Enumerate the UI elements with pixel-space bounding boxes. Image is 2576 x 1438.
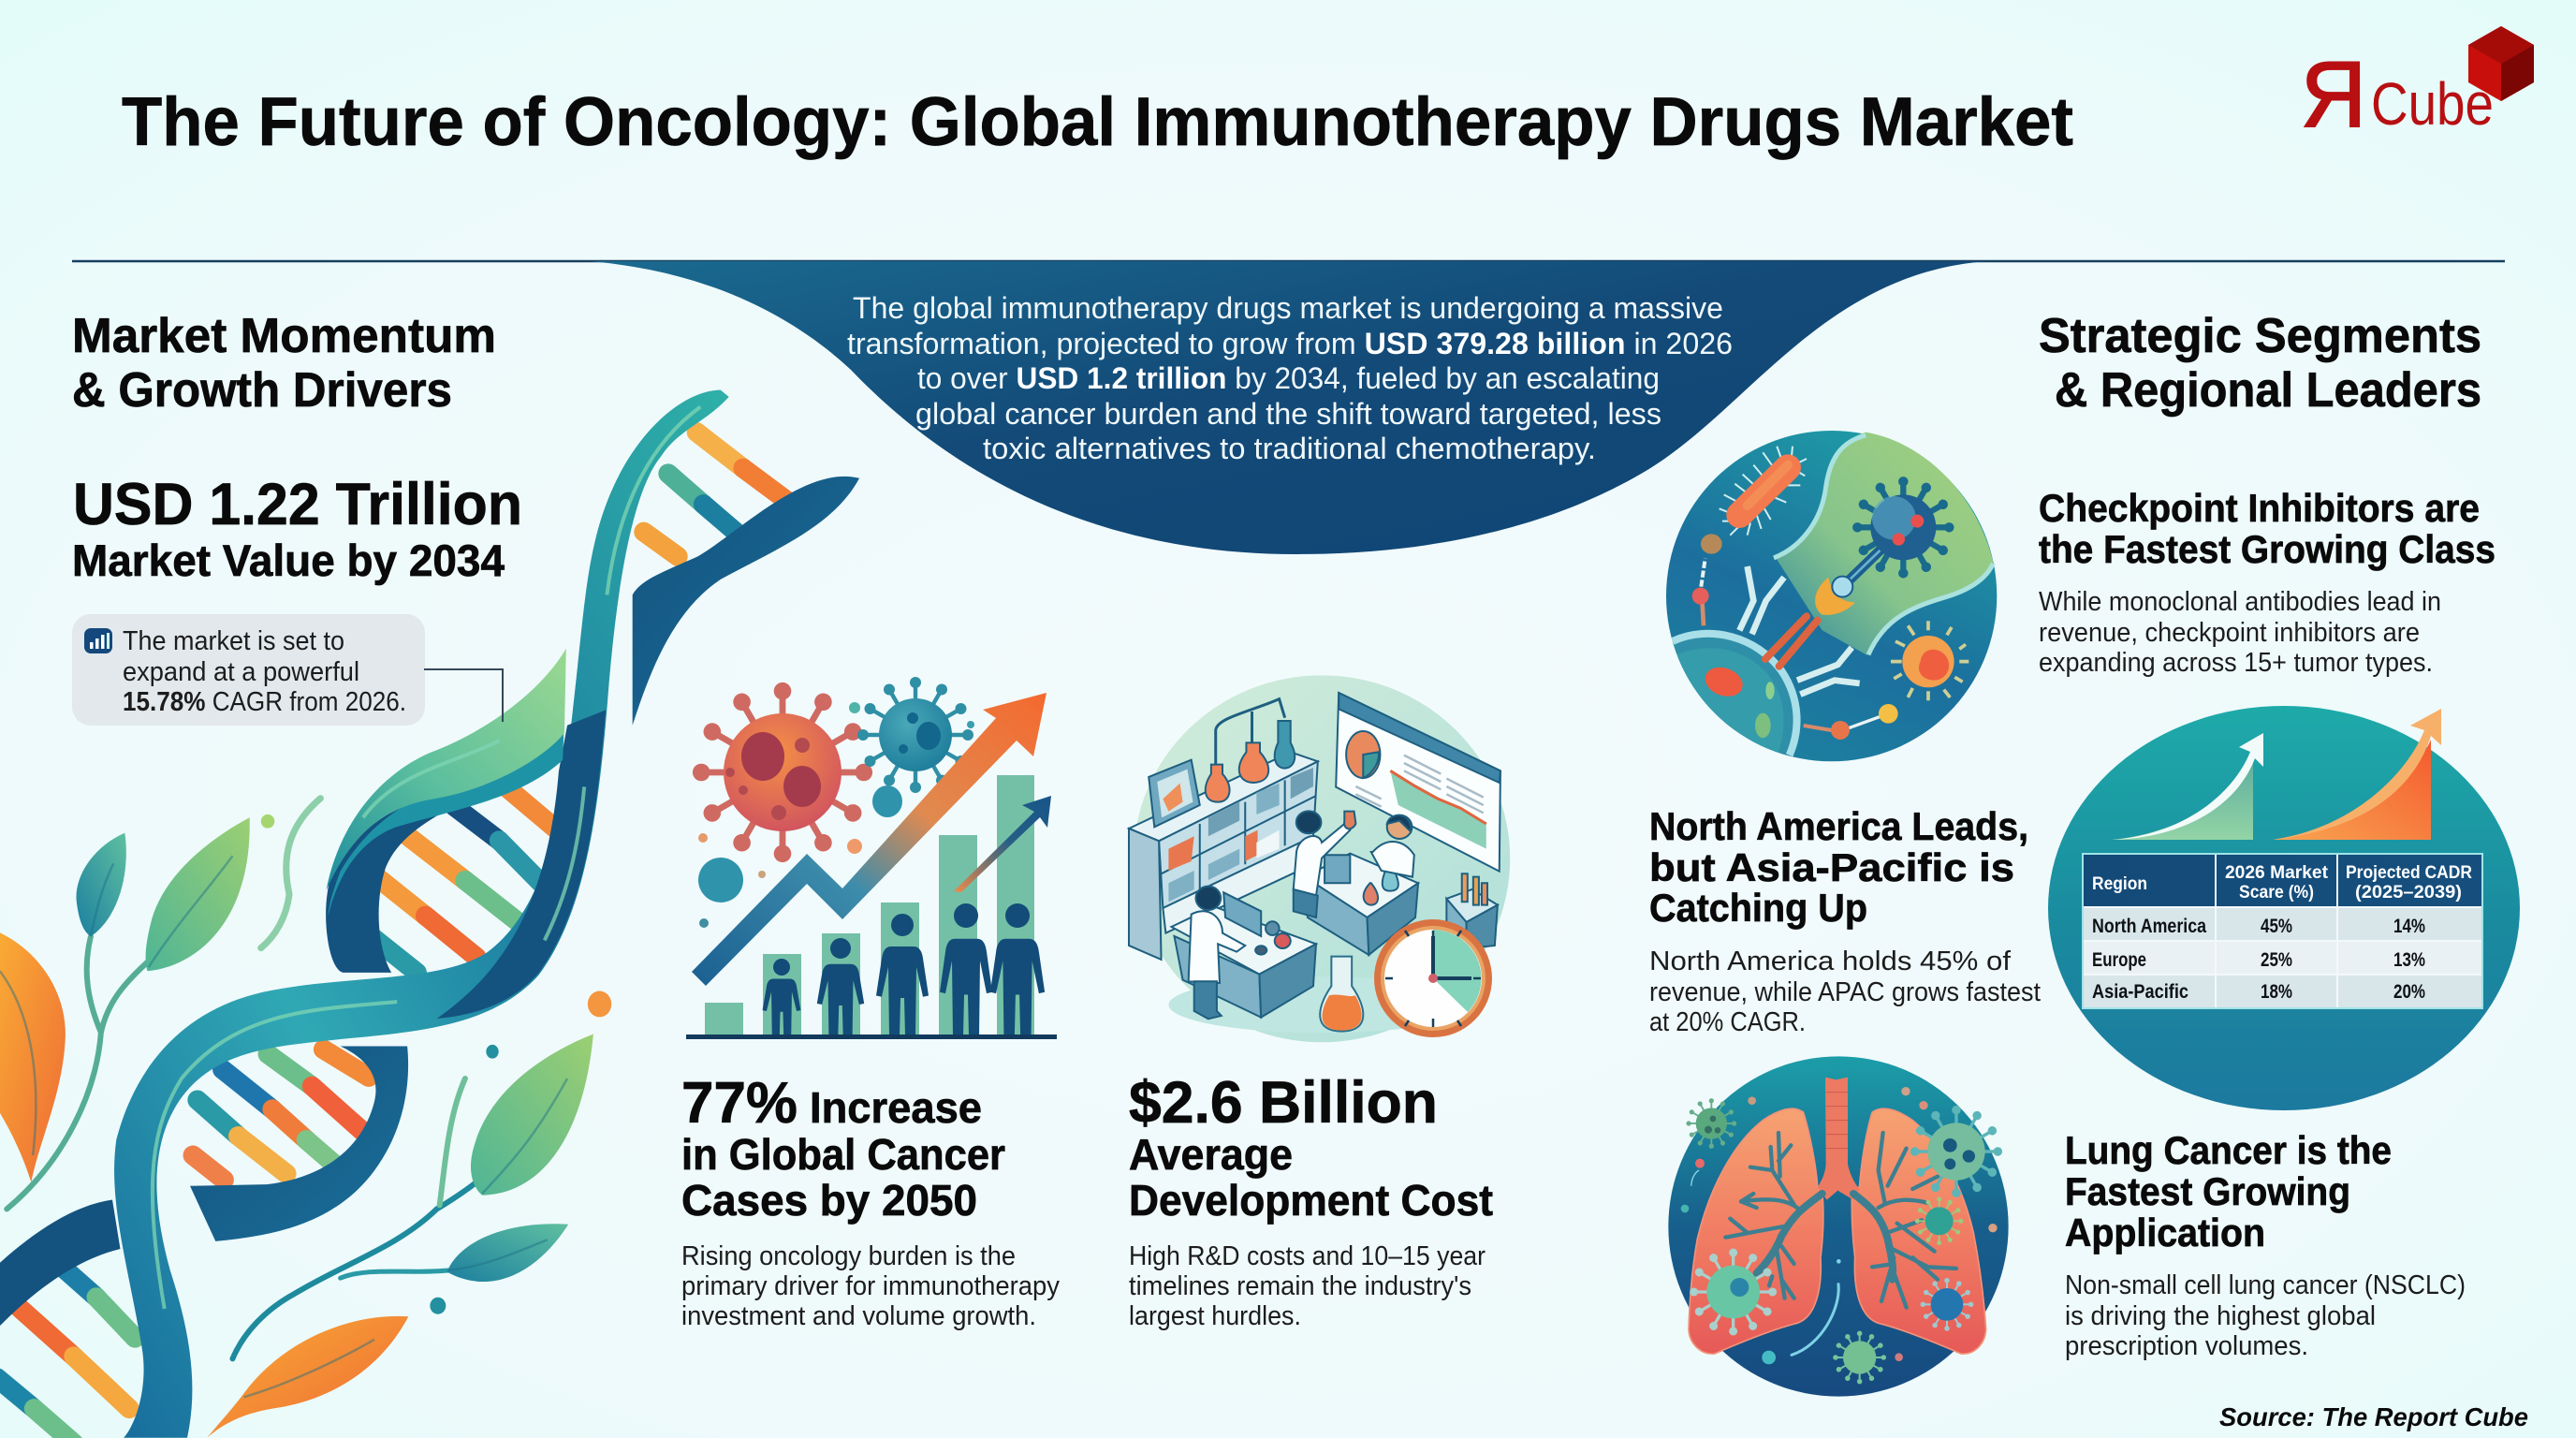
right heading — [2039, 309, 2481, 418]
text: development hurdles: High R&D costs and 10–15 year — [1129, 1241, 1486, 1271]
region table: 2026 Market — [2225, 863, 2329, 883]
antibody prongs and cup — [1765, 578, 1855, 667]
stat: market value: USD 1.22 Trillion — [73, 472, 522, 537]
logo: RCube: Я — [2301, 42, 2366, 146]
text: checkpoint inhibitors: While monoclonal antibodies lead in — [2039, 587, 2441, 617]
intro text: global cancer burden and the shift toward targeted, less — [915, 397, 1661, 431]
text: lung cancer: Non-small cell lung cancer (NSCLC) — [2065, 1270, 2466, 1300]
text: cancer burden: Rising oncology burden is the — [681, 1241, 1016, 1271]
text: checkpoint inhibitors: expanding across 15+ tumor types. — [2039, 648, 2433, 678]
bronchi — [1725, 1133, 1956, 1308]
region table: 14% — [2393, 916, 2425, 937]
shelving unit — [1129, 752, 1319, 960]
receptors and chains — [1701, 559, 1881, 730]
trachea — [1818, 1078, 1860, 1200]
growth arrow: orange — [2273, 709, 2441, 840]
text: checkpoint inhibitors — [2039, 486, 2496, 678]
callout: CAGR: 15.78% CAGR from 2026. — [123, 687, 406, 717]
illustration: cancer growth chart — [686, 677, 1057, 1039]
trend arrow — [692, 693, 1046, 986]
floating cells — [698, 702, 974, 928]
floating particles — [1681, 1087, 1998, 1364]
DNA navy inner band — [437, 710, 606, 1019]
stat: 77% increase: 77% — [681, 1071, 798, 1136]
illustration: checkpoint inhibitors circle — [1647, 431, 1997, 761]
lab backdrop — [1134, 675, 1510, 1042]
region table: Projected CADR — [2346, 863, 2472, 883]
stat: $2.6 billion: Development Cost — [1129, 1176, 1493, 1225]
center bench — [1305, 854, 1418, 955]
text: north america: North America Leads, — [1649, 804, 2028, 848]
intro text: transformation, projected to grow from USD 379.28 billion in 2026 — [847, 327, 1733, 360]
data screen — [1336, 693, 1500, 872]
text: north america — [1649, 804, 2041, 1037]
right lung — [1852, 1108, 1986, 1354]
front bench — [1171, 892, 1316, 1018]
logo: RCube — [2301, 26, 2534, 146]
text: north america: at 20% CAGR. — [1649, 1007, 1806, 1037]
callout: CAGR — [72, 614, 425, 726]
text: north america: North America holds 45% of — [1649, 946, 2012, 976]
leaf stems — [7, 799, 567, 1358]
lab flask — [1320, 957, 1363, 1032]
DNA green ribbon — [326, 649, 566, 890]
decorative dots — [261, 814, 611, 1314]
left heading: & Growth Drivers — [72, 363, 452, 418]
navy virus — [1832, 477, 1954, 597]
region table: 20% — [2393, 981, 2425, 1003]
teal virus — [857, 677, 973, 793]
intro text: toxic alternatives to traditional chemotherapy. — [983, 432, 1596, 465]
text: lung cancer: Fastest Growing — [2065, 1169, 2350, 1213]
intro wave panel — [590, 261, 1989, 554]
region table: Region — [2092, 874, 2147, 894]
sun cell — [1891, 621, 1969, 700]
region table: Europe — [2092, 949, 2146, 971]
bacterium — [1720, 447, 1807, 536]
region table: (2025–2039) — [2355, 883, 2462, 902]
red virus — [693, 682, 872, 862]
callout: CAGR: expand at a powerful — [123, 657, 359, 687]
scientist standing — [1294, 811, 1355, 917]
cell membrane — [1672, 629, 1801, 756]
illustration: research lab — [1129, 675, 1510, 1042]
lung viruses — [1686, 1098, 2002, 1384]
DNA rungs — [0, 433, 790, 1438]
text: lung cancer — [2065, 1128, 2466, 1361]
chart baseline — [686, 1034, 1057, 1039]
DNA navy strands — [0, 477, 859, 1326]
green patch — [1776, 433, 1993, 655]
text: north america: revenue, while APAC grows fastest — [1649, 977, 2041, 1007]
source note: Source: The Report Cube — [2219, 1402, 2528, 1431]
icon: bar chart — [84, 628, 112, 653]
intro text: to over USD 1.2 trillion by 2034, fueled by an escalating — [917, 361, 1660, 395]
scientist at computer — [1189, 887, 1245, 1019]
right heading: & Regional Leaders — [2055, 363, 2481, 418]
scientist seated — [1371, 815, 1414, 877]
DNA teal layer under ribbon — [328, 718, 564, 917]
intro text: The global immunotherapy drugs market is undergoing a massive — [853, 291, 1723, 325]
region table: 13% — [2393, 949, 2425, 971]
region table: 18% — [2261, 981, 2292, 1003]
text: checkpoint inhibitors: revenue, checkpoint inhibitors are — [2039, 618, 2420, 648]
callout connector — [424, 669, 503, 722]
shelf items — [1168, 768, 1313, 902]
stat: 77% increase: Increase — [810, 1083, 982, 1132]
callout: CAGR: The market is set to — [123, 626, 344, 656]
DNA main ribbon — [114, 389, 729, 1438]
text: lung cancer: Application — [2065, 1211, 2265, 1255]
regional table circle — [2048, 706, 2520, 1110]
header rule — [72, 260, 2505, 262]
tablet device — [1149, 760, 1200, 827]
text: lung cancer: prescription volumes. — [2065, 1331, 2308, 1361]
text: lung cancer: is driving the highest global — [2065, 1301, 2376, 1331]
region table: North America — [2092, 916, 2206, 937]
region table — [2083, 854, 2482, 1008]
intro text — [847, 291, 1733, 465]
text: development hurdles: timelines remain the industry's — [1129, 1271, 1471, 1301]
stat: 77% increase: Cases by 2050 — [681, 1176, 977, 1225]
illustration: lungs circle — [1668, 1056, 2009, 1397]
text: cancer burden: primary driver for immunotherapy — [681, 1271, 1060, 1301]
title: The Future of Oncology: Global Immunotherapy Drugs Market — [122, 84, 2073, 160]
stat: $2.6 billion: Average — [1129, 1130, 1293, 1179]
text: cancer burden: investment and volume growth. — [681, 1301, 1036, 1331]
people silhouettes — [763, 903, 1045, 1036]
region table: 45% — [2261, 916, 2292, 937]
text: lung cancer: Lung Cancer is the — [2065, 1128, 2392, 1172]
chart bars — [705, 775, 1034, 1036]
right side table with tubes — [1446, 873, 1498, 948]
growth arrow: green — [2112, 733, 2263, 840]
text: checkpoint inhibitors: the Fastest Growing Class — [2039, 527, 2496, 571]
stat: $2.6 billion: $2.6 Billion — [1129, 1070, 1438, 1136]
stat: market value: Market Value by 2034 — [72, 536, 505, 585]
text: cancer burden — [681, 1241, 1060, 1331]
secondary arrow — [954, 796, 1051, 892]
illustration: DNA helix and leaves — [0, 389, 859, 1438]
left heading: Market Momentum — [72, 309, 496, 363]
flasks and tubing — [1206, 699, 1295, 802]
stat: 77% increase — [681, 1071, 1005, 1225]
text: checkpoint inhibitors: Checkpoint Inhibitors are — [2039, 486, 2480, 530]
ribbon highlights — [153, 406, 700, 1309]
region table: Asia-Pacific — [2092, 981, 2188, 1003]
region table: 25% — [2261, 949, 2292, 971]
region table: Scare (%) — [2239, 883, 2314, 902]
right heading: Strategic Segments — [2039, 309, 2481, 363]
leaves — [0, 817, 593, 1438]
text: north america: Catching Up — [1649, 886, 1867, 930]
left heading — [72, 309, 496, 418]
text: development hurdles: largest hurdles. — [1129, 1301, 1301, 1331]
icon: clock — [1374, 919, 1492, 1037]
stat: 77% increase: in Global Cancer — [681, 1130, 1005, 1179]
stat: market value — [72, 472, 522, 585]
left lung — [1689, 1108, 1823, 1354]
stat: $2.6 billion — [1129, 1070, 1493, 1225]
logo: RCube: Cube — [2371, 70, 2494, 138]
text: development hurdles — [1129, 1241, 1486, 1331]
text: north america: but Asia-Pacific is — [1649, 845, 2014, 889]
